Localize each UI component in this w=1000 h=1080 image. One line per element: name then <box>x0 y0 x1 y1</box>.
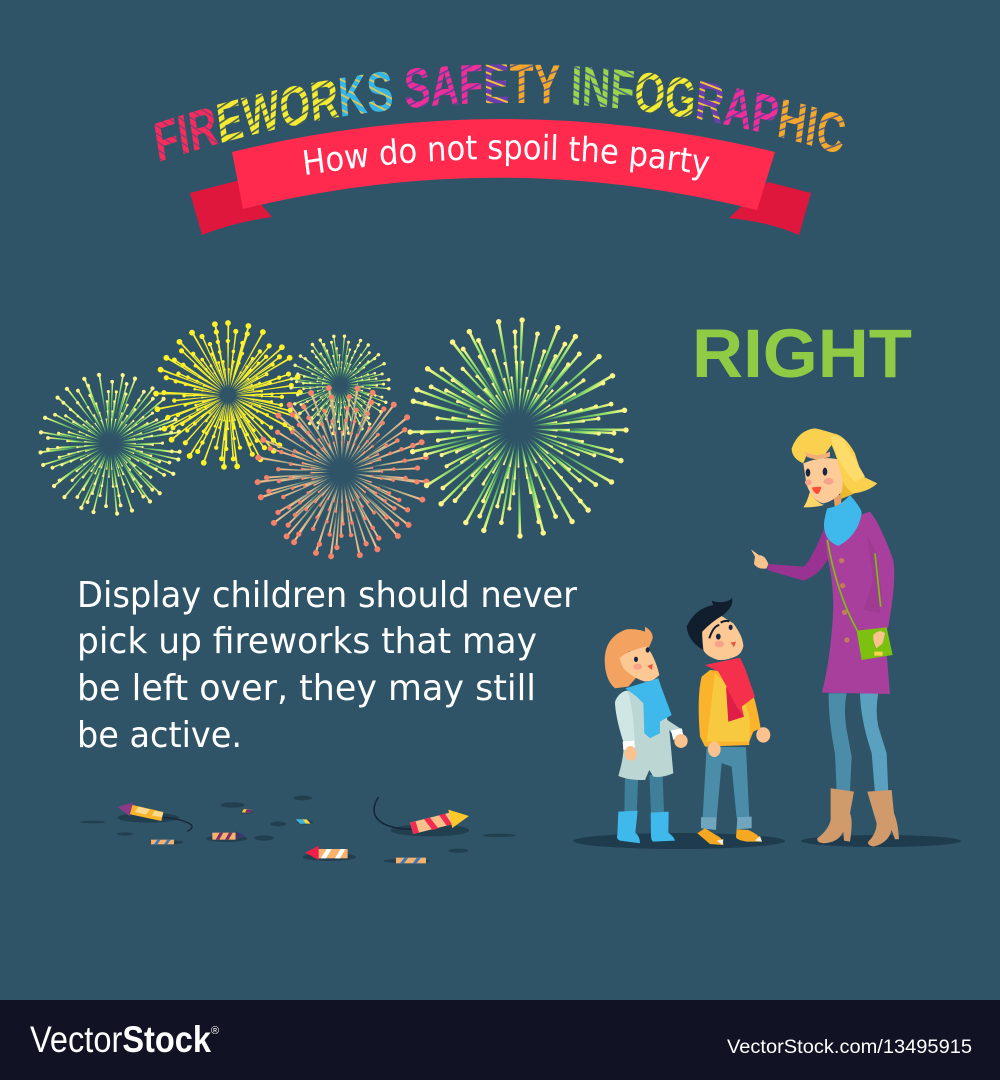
text block: safety advice: be active. <box>77 715 242 756</box>
rocket: large red stripes with fuse <box>374 797 469 834</box>
rocket: small yellow fragment <box>242 809 253 813</box>
figure: girl <box>605 627 688 843</box>
firework: small green <box>281 326 399 444</box>
rocket: purple tip <box>118 802 192 831</box>
ribbon banner with subtitle <box>190 119 811 235</box>
title: arched heading: FIREWORKS SAFETY INFOGRAPHIC <box>154 64 845 162</box>
heading: RIGHT: RIGHT <box>692 315 912 392</box>
text block: safety advice: pick up fireworks that may <box>77 621 537 662</box>
rocket: red tip, white stripes <box>305 846 348 860</box>
rocket: small blue fragment <box>296 819 311 824</box>
footer registered mark: ® <box>211 1025 219 1037</box>
firework: orange <box>209 339 475 605</box>
text block: safety advice: be left over, they may still <box>77 668 536 709</box>
ground shadows <box>573 833 961 849</box>
firework: yellow <box>115 282 341 508</box>
spent rockets on the ground <box>80 796 516 863</box>
firework: green left <box>18 352 202 536</box>
footer logo: VectorStock <box>30 1019 211 1060</box>
footer image id: VectorStock.com/13495915 <box>727 1037 972 1058</box>
text block: safety advice: Display children should never <box>77 575 577 616</box>
ribbon banner with subtitle: How do not spoil the party <box>304 134 710 180</box>
figure: woman pointing <box>751 428 899 847</box>
figure: boy <box>687 598 770 845</box>
text block: safety advice <box>77 575 577 756</box>
footer bar <box>0 1000 1000 1080</box>
rocket: blue stripes <box>396 858 426 863</box>
rocket: purple stripes <box>212 831 246 840</box>
rocket: striped fragment <box>151 840 174 844</box>
firework: large green <box>364 274 672 582</box>
